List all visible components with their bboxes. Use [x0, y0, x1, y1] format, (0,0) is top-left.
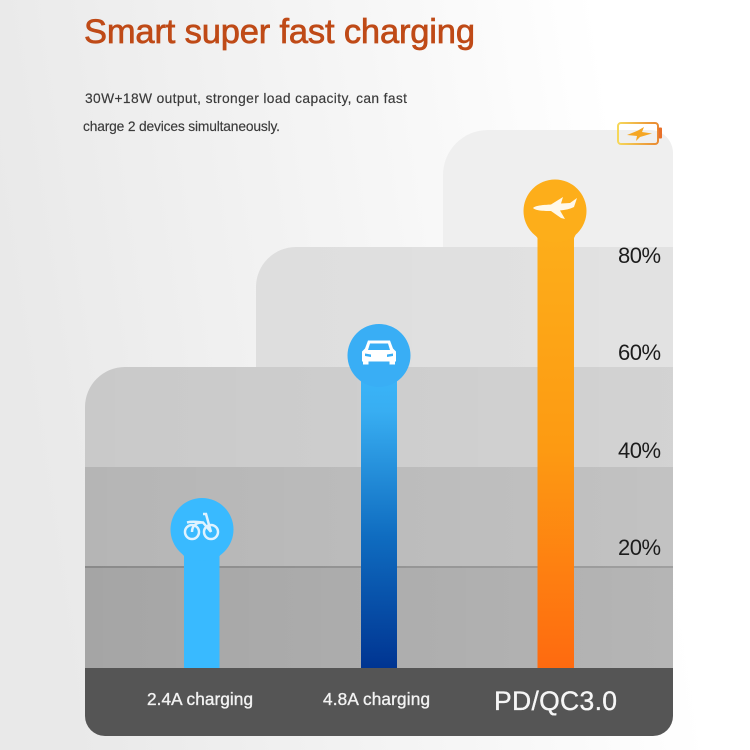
icon: bicycle: [185, 514, 218, 539]
percentage labels: 20%: [618, 535, 661, 560]
panel: stepped level backdrop: [85, 130, 673, 669]
panel: bottom label bar: [85, 668, 673, 736]
bar: 2.4A bicycle: [170, 498, 234, 669]
label: 4.8A charging: 4.8A charging: [323, 689, 430, 709]
icon: battery with lightning bolt: [618, 123, 662, 144]
description text: [83, 91, 407, 134]
description text: 30W+18W output, stronger load capacity, can fast: [85, 91, 407, 106]
description text: charge 2 devices simultaneously.: [83, 119, 280, 134]
title: Smart super fast charging: [84, 13, 475, 51]
percentage labels: [618, 243, 661, 560]
label: PD/QC3.0: PD/QC3.0: [494, 686, 617, 716]
icon: airplane: [533, 197, 577, 219]
bar: 4.8A car: [348, 324, 410, 669]
icon: car: [362, 340, 396, 364]
percentage labels: 80%: [618, 243, 661, 268]
label: 2.4A charging: 2.4A charging: [147, 689, 253, 709]
percentage labels: 40%: [618, 438, 661, 463]
percentage labels: 60%: [618, 340, 661, 365]
bar: PD/QC3.0 plane: [524, 180, 586, 669]
